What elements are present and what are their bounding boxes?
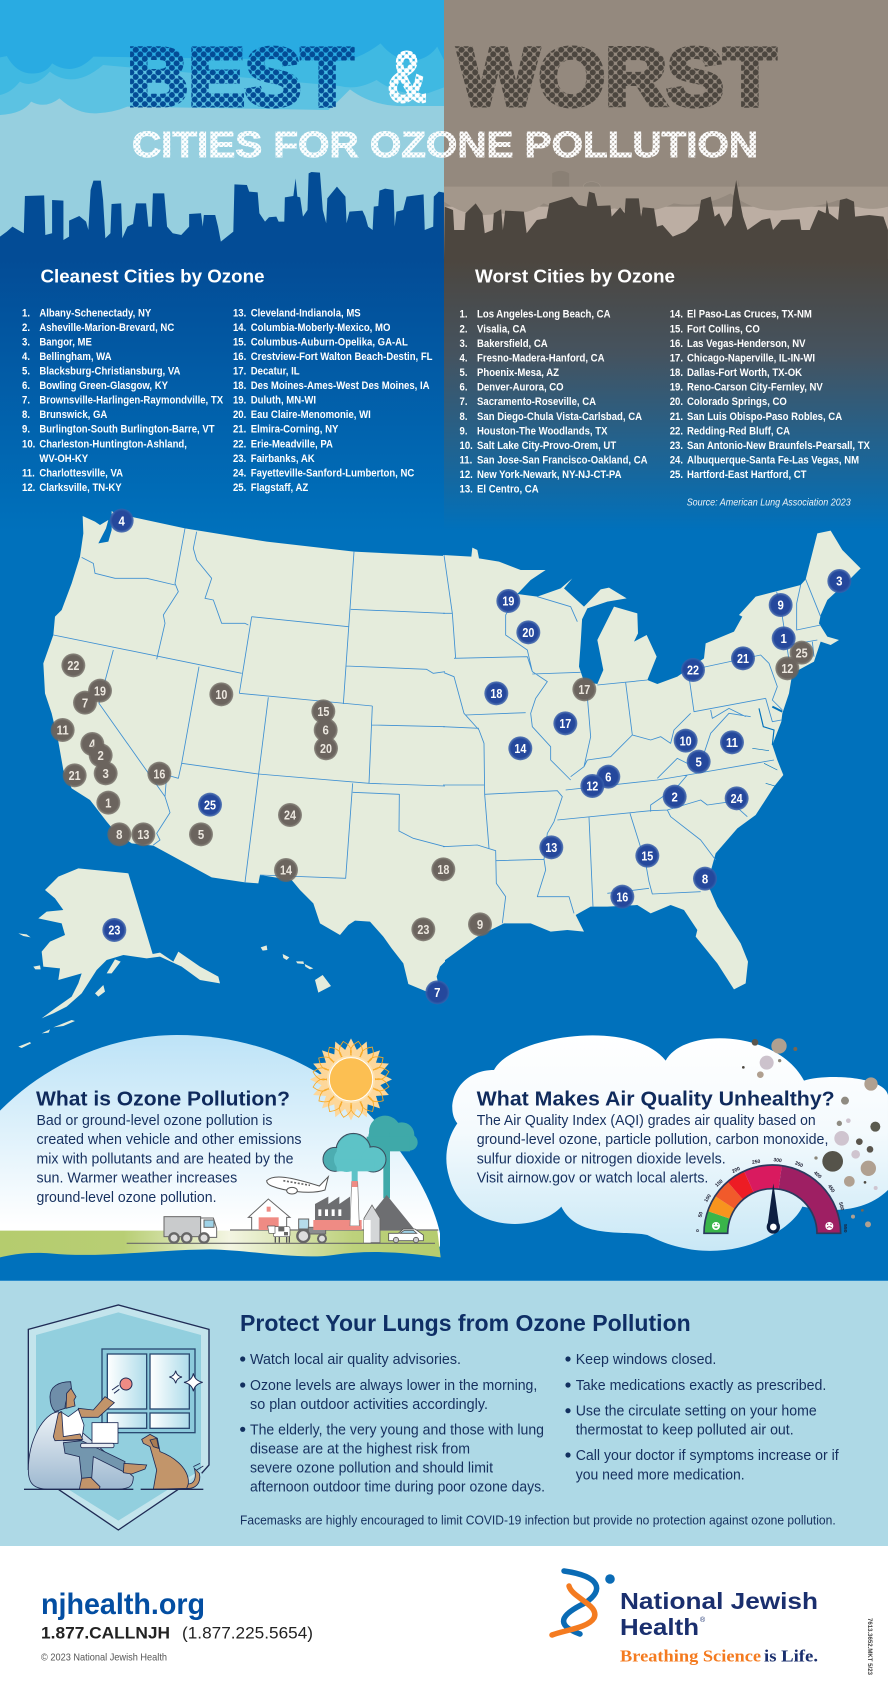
- list: worst 14 to 25: 21.: [670, 411, 683, 423]
- phone number: [41, 1624, 313, 1642]
- heading: what is ozone pollution: What is Ozone Pollution?: [36, 1088, 290, 1110]
- list: worst 14 to 25: Las Vegas-Henderson, NV: [687, 338, 806, 350]
- header background: sky and smog: [0, 0, 888, 260]
- list: worst 1 to 13: Phoenix-Mesa, AZ: [477, 367, 559, 379]
- smog clouds and ghost buildings behind worst skyline: [444, 171, 888, 260]
- icon: sun: [309, 1038, 393, 1121]
- list: worst 14 to 25: 17.: [670, 353, 683, 365]
- markers: worst cities (gray): 7: [82, 695, 88, 710]
- logo: tagline: is Life.: [764, 1646, 818, 1666]
- list: worst 14 to 25: San Luis Obispo-Paso Robles, CA: [687, 411, 843, 423]
- markers: worst cities (gray): [51, 641, 814, 941]
- heading: cleanest cities: Cleanest Cities by Ozone: [40, 266, 264, 286]
- text: ozone explanation: sun. Warmer weather increases: [36, 1171, 237, 1187]
- icon: car: [389, 1229, 423, 1243]
- icon: chimney: [348, 1181, 362, 1230]
- cloud shape: [446, 1035, 888, 1251]
- gauge labels: 200: [731, 1166, 741, 1175]
- list: worst 14 to 25: 18.: [670, 367, 683, 379]
- map: United States: [18, 509, 861, 1048]
- markers: worst cities (gray): 20: [320, 741, 332, 756]
- list: cleanest 13 to 25: Fayetteville-Sanford-Lumberton, NC: [251, 468, 415, 480]
- markers: cleanest cities (blue): 16: [616, 889, 628, 904]
- markers: cleanest cities (blue): 13: [545, 840, 557, 855]
- markers: cleanest cities (blue): 21: [737, 651, 749, 666]
- text: AQI explanation: The Air Quality Index (AQI) grades air quality based on: [477, 1113, 816, 1129]
- skyline: clean city: [0, 172, 444, 260]
- title: WORST: [458, 32, 776, 123]
- list: cleanest 13 to 25: 18.: [233, 380, 246, 392]
- footer: [0, 1546, 888, 1695]
- list: cleanest 1 to 12: Burlington-South Burlington-Barre, VT: [39, 424, 215, 436]
- gauge labels: 550: [842, 1224, 848, 1233]
- list: cleanest 1 to 12: Albany-Schenectady, NY: [39, 308, 151, 320]
- list: cleanest 1 to 12: Brownsville-Harlingen-Raymondville, TX: [39, 395, 223, 407]
- heading: protect your lungs: Protect Your Lungs from Ozone Pollution: [240, 1310, 691, 1336]
- list: worst 1 to 13: Los Angeles-Long Beach, CA: [477, 309, 611, 321]
- markers: worst cities (gray): 3: [102, 766, 109, 781]
- Alaska: [38, 868, 220, 1018]
- text: AQI explanation: [477, 1113, 828, 1187]
- markers: worst cities (gray): 17: [578, 682, 590, 697]
- text: ozone explanation: ground-level ozone pollution.: [36, 1190, 216, 1206]
- list: worst 14 to 25: Fort Collins, CO: [687, 324, 760, 336]
- markers: cleanest cities (blue): 20: [522, 625, 534, 640]
- list: cleanest 13 to 25: 20.: [233, 410, 246, 421]
- list: cleanest 13 to 25: Des Moines-Ames-West Des Moines, IA: [251, 380, 430, 392]
- bullet list: column 2: Call your doctor if symptoms increase or if: [576, 1448, 840, 1464]
- list: worst 1 to 13: Salt Lake City-Provo-Orem, UT: [477, 440, 617, 452]
- list: cleanest 1 to 12: Bowling Green-Glasgow, KY: [39, 380, 168, 392]
- list: worst 14 to 25: Redding-Red Bluff, CA: [687, 426, 791, 438]
- icon: airplane: [267, 1177, 328, 1194]
- markers: cleanest cities (blue): 17: [559, 716, 571, 731]
- list: worst 14 to 25: Chicago-Naperville, IL-IN-WI: [687, 353, 815, 365]
- website: njhealth.org: [41, 1588, 205, 1621]
- list: cleanest 13 to 25: Flagstaff, AZ: [251, 482, 308, 494]
- list: cleanest 1 to 12: 11.: [22, 468, 35, 480]
- state borders west: [53, 528, 445, 882]
- icon: cow: [268, 1226, 290, 1243]
- heading: worst cities: Worst Cities by Ozone: [475, 266, 675, 286]
- list: cleanest 1 to 12: 7.: [22, 395, 30, 407]
- panel: worst cities list: [460, 266, 870, 508]
- markers: cleanest cities (blue): 22: [687, 663, 699, 678]
- list: cleanest 1 to 12: Clarksville, TN-KY: [39, 482, 122, 494]
- markers: cleanest cities (blue): 19: [502, 594, 514, 609]
- road lines: [127, 1230, 438, 1243]
- person on beanbag: [28, 1382, 147, 1489]
- title: BEST: [127, 32, 353, 123]
- heading: air quality: What Makes Air Quality Unhealthy?: [477, 1088, 835, 1110]
- list: cleanest 13 to 25: Erie-Meadville, PA: [251, 439, 333, 451]
- list: worst 14 to 25: 20.: [670, 397, 683, 408]
- list: cleanest 1 to 12: 12.: [22, 482, 35, 494]
- markers: worst cities (gray): 25: [796, 645, 808, 660]
- gauge needle: [767, 1183, 779, 1227]
- bullet list: column 2: Keep windows closed.: [576, 1352, 716, 1368]
- list: cleanest 1 to 12: 9.: [22, 424, 30, 436]
- gauge labels: 300: [773, 1157, 782, 1164]
- markers: cleanest cities (blue): 9: [777, 598, 784, 613]
- AQI gauge: [695, 1157, 848, 1234]
- list: worst 1 to 13: New York-Newark, NY-NJ-CT-PA: [477, 470, 622, 481]
- list: worst 1 to 13: 8.: [460, 411, 468, 423]
- bullet list: column 2: you need more medication.: [576, 1468, 745, 1484]
- list: worst 14 to 25: 23.: [670, 440, 683, 452]
- text: AQI explanation: ground-level ozone, particle pollution, carbon monoxide,: [477, 1132, 828, 1148]
- phone number: 1.877.CALLNJH: [41, 1624, 170, 1642]
- markers: worst cities (gray): 5: [198, 827, 204, 842]
- markers: worst cities (gray): 10: [215, 687, 227, 702]
- markers: worst cities (gray): 1: [105, 795, 111, 810]
- icon: barn: [248, 1199, 290, 1230]
- text: ozone explanation: mix with pollutants and are heated by the: [36, 1151, 294, 1167]
- markers: cleanest cities (blue): 15: [641, 848, 653, 863]
- markers: worst cities (gray): 21: [69, 768, 81, 783]
- list: cleanest 13 to 25: 21.: [233, 424, 246, 436]
- list: cleanest 1 to 12: 8.: [22, 410, 30, 421]
- list: worst 1 to 13: San Diego-Chula Vista-Carlsbad, CA: [477, 411, 643, 423]
- list: cleanest 1 to 12: 4.: [22, 351, 30, 363]
- gauge faces: [712, 1222, 720, 1230]
- gauge labels: 150: [714, 1178, 725, 1189]
- list: cleanest 13 to 25: 14.: [233, 322, 246, 334]
- markers: worst cities (gray): 22: [67, 658, 79, 673]
- list: worst 1 to 13: 1.: [460, 309, 468, 321]
- list: worst 14 to 25: Albuquerque-Santa Fe-Las Vegas, NM: [687, 455, 859, 467]
- gauge labels: 450: [826, 1184, 836, 1194]
- markers: worst cities (gray): 4: [89, 737, 96, 752]
- bays: [752, 707, 782, 787]
- list: cleanest 1 to 12: Asheville-Marion-Brevard, NC: [39, 322, 175, 334]
- list: cleanest 1 to 12: WV-OH-KY: [39, 453, 88, 465]
- list: cleanest 1 to 12: 3.: [22, 337, 30, 349]
- list: cleanest 13 to 25: Eau Claire-Menomonie, WI: [251, 410, 371, 421]
- list: worst 1 to 13: El Centro, CA: [477, 484, 539, 496]
- text: ozone explanation: [36, 1113, 302, 1206]
- list: worst 14 to 25: Colorado Springs, CO: [687, 397, 787, 408]
- gauge labels: 250: [752, 1159, 761, 1166]
- Hawaii: [261, 945, 331, 993]
- list: cleanest 13 to 25: 16.: [233, 351, 246, 363]
- markers: worst cities (gray): 8: [116, 827, 122, 842]
- markers: cleanest cities (blue): 8: [702, 871, 708, 886]
- panel: cleanest cities list: [22, 266, 433, 494]
- bullet list: column 2: Take medications exactly as prescribed.: [576, 1378, 826, 1394]
- bullet list: column 1: [240, 1352, 545, 1496]
- logo: wordmark: [620, 1588, 818, 1640]
- panel: protect your lungs: [0, 1280, 888, 1546]
- icon: tractor: [297, 1219, 326, 1243]
- list: cleanest 1 to 12: 2.: [22, 322, 30, 334]
- list: cleanest 13 to 25: Elmira-Corning, NY: [251, 424, 338, 436]
- gauge labels: 100: [703, 1193, 713, 1204]
- list: worst 1 to 13: 5.: [460, 367, 468, 379]
- illustration: shield with person and dog: [24, 1305, 209, 1530]
- list: cleanest 13 to 25: Fairbanks, AK: [251, 453, 315, 465]
- list: cleanest 1 to 12: Brunswick, GA: [39, 410, 108, 421]
- list: cleanest 13 to 25: 25.: [233, 482, 246, 494]
- panel: what is ozone pollution: [0, 1035, 441, 1257]
- list: cleanest 1 to 12: 5.: [22, 366, 30, 378]
- list: cleanest 13 to 25: Crestview-Fort Walton Beach-Destin, FL: [251, 351, 433, 363]
- ground: [0, 1231, 441, 1257]
- text: AQI explanation: Visit airnow.gov or watch local alerts.: [477, 1171, 708, 1187]
- markers: worst cities (gray): 16: [153, 766, 165, 781]
- markers: worst cities (gray): 12: [781, 661, 793, 676]
- markers: worst cities (gray): 18: [437, 862, 449, 877]
- list: worst 1 to 13: [460, 309, 648, 496]
- markers: cleanest cities (blue): 23: [108, 923, 120, 938]
- list: cleanest 1 to 12: 10.: [22, 439, 35, 451]
- markers: cleanest cities (blue): 1: [780, 631, 787, 646]
- list: worst 14 to 25: Hartford-East Hartford, CT: [687, 470, 807, 481]
- text: AQI explanation: sulfur dioxide or nitrogen dioxide levels.: [477, 1151, 726, 1167]
- list: worst 1 to 13: Houston-The Woodlands, TX: [477, 426, 608, 438]
- list: worst 14 to 25: 16.: [670, 338, 683, 350]
- eastern states: [443, 531, 861, 989]
- list: worst 1 to 13: 4.: [460, 353, 468, 365]
- job code: 7613.3652.MKT 5/23: [866, 1618, 873, 1675]
- list: cleanest 1 to 12: Blacksburg-Christiansburg, VA: [39, 366, 181, 378]
- markers: worst cities (gray): 2: [97, 748, 104, 763]
- title: [127, 32, 776, 165]
- list: worst 14 to 25: 14.: [670, 309, 683, 321]
- list: worst 1 to 13: 12.: [460, 470, 473, 481]
- list: worst 14 to 25: 19.: [670, 382, 683, 394]
- list: worst 14 to 25: 15.: [670, 324, 683, 336]
- list: cleanest 1 to 12: [22, 308, 223, 494]
- state borders east: [443, 555, 821, 923]
- icon: truck: [164, 1217, 217, 1243]
- list: worst 1 to 13: Sacramento-Roseville, CA: [477, 397, 597, 408]
- markers: worst cities (gray): 19: [94, 683, 106, 698]
- list: worst 1 to 13: 2.: [460, 324, 468, 336]
- markers: worst cities (gray): 15: [317, 704, 329, 719]
- icon: smoke clouds: [323, 1116, 418, 1198]
- list: worst 1 to 13: Fresno-Madera-Hanford, CA: [477, 353, 605, 365]
- list: cleanest 13 to 25: Duluth, MN-WI: [251, 395, 316, 407]
- list: cleanest 13 to 25: Cleveland-Indianola, MS: [251, 308, 361, 320]
- list: cleanest 1 to 12: Bangor, ME: [39, 337, 92, 349]
- bullet list: column 1: so plan outdoor activities accordingly.: [250, 1397, 488, 1413]
- gauge labels: 500: [837, 1202, 845, 1211]
- logo: wordmark: ®: [700, 1616, 706, 1624]
- skyline: polluted city: [444, 180, 888, 260]
- list: cleanest 13 to 25: 24.: [233, 468, 246, 480]
- list: worst 1 to 13: 3.: [460, 338, 468, 350]
- markers: cleanest cities (blue): [102, 509, 851, 1004]
- bullet list: column 1: Watch local air quality advisories.: [250, 1352, 461, 1368]
- bullet list: column 1: Ozone levels are always lower in the morning,: [250, 1378, 537, 1394]
- list: worst 1 to 13: San Jose-San Francisco-Oakland, CA: [477, 455, 648, 467]
- logo: wordmark: National Jewish: [620, 1588, 818, 1614]
- title: &: [387, 38, 427, 118]
- gauge labels: 400: [812, 1170, 823, 1180]
- markers: cleanest cities (blue): 3: [836, 574, 842, 589]
- markers: cleanest cities (blue): 14: [514, 741, 527, 756]
- list: worst 14 to 25: 22.: [670, 426, 683, 438]
- title: CITIES FOR OZONE POLLUTION: [132, 124, 758, 165]
- text: ozone explanation: created when vehicle and other emissions: [36, 1132, 302, 1148]
- list: worst 14 to 25: [670, 309, 870, 481]
- icon: aerosol tank: [364, 1205, 380, 1243]
- markers: worst cities (gray): 9: [477, 917, 483, 932]
- markers: cleanest cities (blue): 12: [586, 779, 598, 794]
- logo: tagline: [620, 1646, 818, 1666]
- list: cleanest 13 to 25: Columbia-Moberly-Mexico, MO: [251, 322, 390, 334]
- facemask note: Facemasks are highly encouraged to limit COVID-19 infection but provide no protection against ozone pollution.: [240, 1514, 836, 1528]
- Alaskan islands: [18, 933, 121, 997]
- list: cleanest 13 to 25: 13.: [233, 308, 246, 320]
- list: worst 1 to 13: 9.: [460, 426, 468, 438]
- list: worst 14 to 25: San Antonio-New Braunfels-Pearsall, TX: [687, 440, 870, 452]
- markers: cleanest cities (blue): 25: [204, 797, 216, 812]
- list: cleanest 1 to 12: Charleston-Huntington-Ashland,: [39, 439, 187, 451]
- bullet list: column 2: [565, 1352, 840, 1484]
- markers: worst cities (gray): 14: [280, 863, 293, 878]
- list: worst 14 to 25: 25.: [670, 470, 683, 481]
- markers: worst cities (gray): 11: [57, 723, 69, 738]
- list: cleanest 1 to 12: 6.: [22, 380, 30, 392]
- list: worst 1 to 13: 7.: [460, 397, 468, 408]
- markers: worst cities (gray): 23: [417, 922, 429, 937]
- gauge labels: 350: [794, 1160, 804, 1169]
- gauge labels: 50: [697, 1211, 705, 1218]
- Aleutian islands: [18, 1020, 75, 1048]
- list: cleanest 13 to 25: 23.: [233, 453, 246, 465]
- markers: cleanest cities (blue): 24: [731, 791, 743, 806]
- list: cleanest 1 to 12: Charlottesville, VA: [39, 468, 124, 480]
- list: cleanest 13 to 25: 17.: [233, 366, 246, 378]
- list: cleanest 1 to 12: 1.: [22, 308, 30, 320]
- list: worst 1 to 13: Denver-Aurora, CO: [477, 382, 564, 394]
- dome illustration: [0, 1035, 441, 1257]
- logo: wordmark: Health: [620, 1614, 699, 1640]
- list: cleanest 13 to 25: Decatur, IL: [251, 366, 300, 378]
- copyright: © 2023 National Jewish Health: [41, 1652, 167, 1664]
- logo: tagline: Breathing Science: [620, 1646, 761, 1666]
- list: worst 1 to 13: 6.: [460, 382, 468, 394]
- list: cleanest 13 to 25: 22.: [233, 439, 246, 451]
- gauge labels: 0: [695, 1229, 701, 1232]
- markers: cleanest cities (blue): 5: [695, 754, 702, 769]
- bullet list: column 1: The elderly, the very young and those with lung: [250, 1422, 544, 1438]
- list: worst 14 to 25: Dallas-Fort Worth, TX-OK: [687, 367, 803, 379]
- markers: worst cities (gray): 13: [137, 827, 149, 842]
- markers: worst cities (gray): 24: [284, 808, 297, 823]
- bullet list: column 2: Use the circulate setting on your home: [576, 1404, 817, 1420]
- bullet list: column 1: disease are at the highest risk from: [250, 1442, 470, 1458]
- list: cleanest 13 to 25: Columbus-Auburn-Opelika, GA-AL: [251, 337, 408, 349]
- list: worst 14 to 25: Reno-Carson City-Fernley, NV: [687, 382, 823, 394]
- list: worst 1 to 13: 13.: [460, 484, 473, 496]
- bullet list: column 1: severe ozone pollution and should limit: [250, 1461, 493, 1477]
- gauge labels: [695, 1157, 848, 1233]
- list: cleanest 13 to 25: 19.: [233, 395, 246, 407]
- list: cleanest 13 to 25: 15.: [233, 337, 246, 349]
- icon: factory: [313, 1197, 362, 1230]
- logo: helix mark: [552, 1571, 615, 1635]
- list: worst 1 to 13: Bakersfield, CA: [477, 338, 548, 350]
- markers: cleanest cities (blue): 4: [118, 513, 126, 528]
- list backgrounds and map ocean: [0, 259, 888, 1281]
- markers: worst cities (gray): 6: [322, 723, 329, 738]
- source note: Source: American Lung Association 2023: [687, 496, 851, 508]
- list: worst 1 to 13: 11.: [460, 455, 472, 467]
- text: ozone explanation: Bad or ground-level ozone pollution is: [36, 1113, 272, 1129]
- list: worst 1 to 13: Visalia, CA: [477, 324, 527, 336]
- phone number: (1.877.225.5654): [182, 1624, 313, 1642]
- panel: what makes air quality unhealthy: [446, 1035, 888, 1251]
- markers: cleanest cities (blue): 7: [434, 985, 440, 1000]
- markers: cleanest cities (blue): 10: [680, 733, 692, 748]
- markers: cleanest cities (blue): 2: [671, 789, 678, 804]
- list: worst 14 to 25: 24.: [670, 455, 683, 467]
- bullet list: column 1: afternoon outdoor time during poor ozone days.: [250, 1480, 545, 1496]
- particles: [742, 1038, 880, 1227]
- window: [102, 1349, 195, 1433]
- list: worst 14 to 25: El Paso-Las Cruces, TX-NM: [687, 309, 812, 321]
- icon: power plant cone: [368, 1195, 415, 1230]
- markers: cleanest cities (blue): 6: [605, 769, 611, 784]
- markers: cleanest cities (blue): 18: [490, 686, 502, 701]
- western states: [43, 511, 445, 994]
- list: cleanest 13 to 25: [233, 308, 433, 494]
- list: cleanest 1 to 12: Bellingham, WA: [39, 351, 112, 363]
- bullet list: column 2: thermostat to keep polluted air out.: [576, 1423, 794, 1439]
- list: worst 1 to 13: 10.: [460, 440, 473, 452]
- dog: [142, 1434, 203, 1489]
- markers: cleanest cities (blue): 11: [726, 735, 738, 750]
